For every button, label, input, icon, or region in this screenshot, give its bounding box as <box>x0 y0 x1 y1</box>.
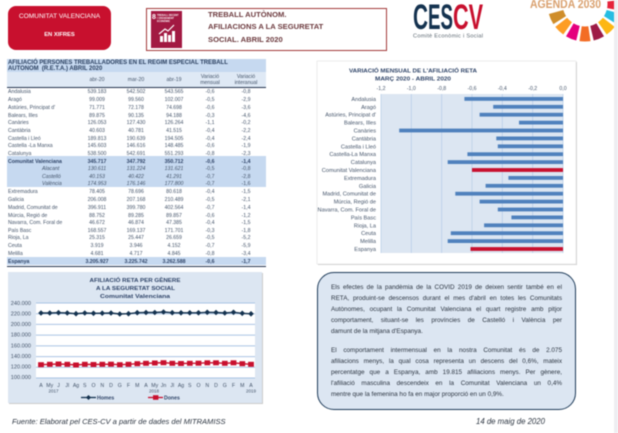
logo: CES-CV: Comitè Econòmic i Social <box>413 34 483 40</box>
series: Dones <box>41 363 251 365</box>
table rows: -1,6 <box>242 181 250 187</box>
y axis labels: 100.000 <box>11 375 31 381</box>
x axis labels <box>377 86 567 92</box>
table rows: 89.857 <box>166 212 182 218</box>
paragraph 1 <box>330 284 562 336</box>
region labels: Canàries <box>354 128 376 134</box>
region labels: Castella i Lleó <box>341 144 376 150</box>
region labels: Comunitat Valenciana <box>322 168 377 174</box>
table rows: 345.717 <box>88 158 106 164</box>
table columns header: interanual <box>235 80 257 86</box>
table rows: Canàries <box>8 120 29 126</box>
table rows: 3.946 <box>130 243 142 249</box>
table rows: -1,2 <box>242 212 250 218</box>
x axis labels: O <box>196 383 201 389</box>
table rows: -0,6 <box>206 259 214 265</box>
table rows: -0,4 <box>206 136 214 142</box>
paragraph 1: Autònomes, ocupant la Comunitat Valenciana el quart registre amb pitjor <box>331 306 562 313</box>
table rows: -2,3 <box>242 151 250 157</box>
table rows: 40.781 <box>128 128 144 134</box>
x axis labels: M <box>135 383 139 389</box>
red badge: Comunitat Valenciana en xifres: COMUNITAT VALENCIANA <box>19 13 100 20</box>
x axis labels: 2018 <box>149 388 160 394</box>
table rows: -0,6 <box>206 143 214 149</box>
table rows: Comunitat Valenciana <box>8 158 62 164</box>
x axis labels: Jl <box>65 383 69 389</box>
table columns header: Variació <box>201 74 219 80</box>
chart title: VARIACIÓ MENSUAL DE L'AFILIACIÓ RETA <box>349 66 477 74</box>
chart title: MARÇ 2020 - ABRIL 2020 <box>375 76 451 82</box>
table rows: 542.691 <box>127 151 145 157</box>
table rows: 174.953 <box>88 181 106 187</box>
table columns header <box>89 74 258 86</box>
table rows: 207.168 <box>127 197 145 203</box>
table rows: Aragó <box>8 97 22 103</box>
table rows: 4.845 <box>168 251 180 257</box>
region labels: Madrid, Comunitat de <box>323 192 376 198</box>
table rows: 176.146 <box>127 181 145 187</box>
table title <box>7 59 266 72</box>
table rows: 74.698 <box>166 105 182 111</box>
x axis labels: S <box>83 383 87 389</box>
table rows: 26.659 <box>166 235 182 241</box>
table rows: -3,6 <box>242 105 250 111</box>
table rows: Astúries, Principat d' <box>8 105 55 111</box>
x axis labels: G <box>118 383 122 389</box>
table columns header: mar-20 <box>128 77 144 83</box>
legend: Dones <box>164 395 180 401</box>
table rows: -2,4 <box>242 136 250 142</box>
table rows: 90.135 <box>128 112 144 118</box>
logo: Agenda 2030 wheel <box>530 0 615 42</box>
table rows: -0,7 <box>206 174 214 180</box>
table rows: -0,6 <box>206 212 214 218</box>
title box <box>146 8 387 51</box>
x axis labels: -0,6 <box>468 86 477 92</box>
chart title: AFILIACIÓ RETA PER GÈNERE <box>90 276 181 284</box>
region labels: Múrcia, Regió de <box>334 200 376 206</box>
y axis labels <box>11 301 31 381</box>
table rows: 148.485 <box>165 143 183 149</box>
x axis labels: N <box>205 383 209 389</box>
region labels: Galicia <box>359 184 377 190</box>
table rows: 102.007 <box>165 97 183 103</box>
y axis labels: 120.000 <box>11 364 31 370</box>
table rows: -0,5 <box>206 97 214 103</box>
table rows: Balears, Illes <box>8 112 38 118</box>
table rows: -0,3 <box>206 112 214 118</box>
table rows: 347.792 <box>127 158 145 164</box>
table rows: 99.009 <box>89 97 105 103</box>
table rows: 169.137 <box>127 228 145 234</box>
x axis labels: -1,0 <box>407 86 416 92</box>
icon: SDG 8 decent work: 8 <box>152 14 156 21</box>
region labels: Ceuta <box>361 231 377 237</box>
region labels: Balears, Illes <box>344 121 376 127</box>
table rows: 25.447 <box>128 235 144 241</box>
heading <box>208 10 324 44</box>
table rows: 538.500 <box>88 151 106 157</box>
table rows: Castella i Lleó <box>8 136 41 142</box>
y axis labels: 200.000 <box>11 322 31 328</box>
bars <box>399 97 563 251</box>
table rows: -0,5 <box>206 197 214 203</box>
table rows: 88.752 <box>89 212 105 218</box>
region labels: Aragó <box>361 105 376 111</box>
x axis labels: A <box>144 383 148 389</box>
table rows: Extremadura <box>8 189 38 195</box>
table rows: 89.285 <box>128 212 144 218</box>
x axis labels: A <box>39 383 43 389</box>
table rows: 46.874 <box>128 220 144 226</box>
icon: SDG 8 decent work <box>150 10 183 49</box>
table rows: -1,4 <box>242 205 250 211</box>
paragraph 2: l'afiliació masculina descendeix en la Comunitat Valenciana un 0,4% <box>331 380 562 387</box>
table rows: -0,6 <box>206 89 214 95</box>
panel: affiliates by gender line chart <box>8 272 264 404</box>
paragraph 1: Els efectes de la pandèmia de la COVID 2019 de deixen sentir també en el <box>331 284 562 291</box>
table rows: -1,1 <box>206 120 214 126</box>
table rows: Alacant <box>42 166 59 172</box>
table rows: -1,5 <box>242 189 250 195</box>
table rows: 206.008 <box>88 197 106 203</box>
region labels: Andalusia <box>351 97 377 103</box>
table rows: 3.262.588 <box>162 259 186 265</box>
region labels <box>318 97 377 253</box>
margin strip <box>614 0 618 433</box>
table: RETA affiliates <box>6 58 267 268</box>
table rows: Múrcia, Regió de <box>8 212 47 218</box>
x axis labels: -1,2 <box>377 86 386 92</box>
table columns header: Variació <box>237 74 255 80</box>
table rows: 78.696 <box>128 189 144 195</box>
table rows: 4.717 <box>130 251 142 257</box>
table rows: -0,7 <box>206 243 214 249</box>
table rows: Cantàbria <box>8 128 30 134</box>
table title: AFILIACIÓ PERSONES TREBALLADORES EN EL REGIM ESPECIAL TREBALL <box>8 60 228 66</box>
region labels: Astúries, Principat d' <box>325 113 376 119</box>
x axis labels <box>39 383 257 394</box>
table header <box>7 72 266 88</box>
table rows: 146.616 <box>127 143 145 149</box>
panel: monthly variation bar chart <box>316 60 578 266</box>
x axis labels: Ag <box>178 383 184 389</box>
region labels: Cantàbria <box>352 136 377 142</box>
table rows: 131.224 <box>127 166 145 172</box>
table rows: 350.712 <box>165 158 183 164</box>
plot background and grid <box>381 94 563 253</box>
icon: SDG 8 decent work: I CREIXEMENT <box>157 17 175 20</box>
legend <box>81 395 180 401</box>
paragraph 2: El comportament intermensual en la nostra Comunitat és de 2.075 <box>331 347 562 354</box>
table rows: -0,7 <box>206 181 214 187</box>
table rows: -5,9 <box>242 243 250 249</box>
x axis labels: Jl <box>170 383 174 389</box>
red badge: Comunitat Valenciana en xifres: EN XIFRES <box>44 32 75 38</box>
table rows: 94.188 <box>166 112 182 118</box>
table rows: 126.264 <box>165 120 183 126</box>
x axis labels: 2017 <box>48 388 59 394</box>
table rows: Rioja, La <box>8 235 28 241</box>
paragraph 1: damunt de la mitjana d'Espanya. <box>331 328 423 335</box>
table rows: 542.502 <box>127 89 145 95</box>
table rows: 551.293 <box>165 151 183 157</box>
region labels: Extremadura <box>344 176 377 182</box>
table rows: Catalunya <box>8 151 31 157</box>
paragraph 2: afiliacions menys, la qual cosa representa un descens del 0,6%, mateix <box>331 358 562 365</box>
region labels: Rioja, La <box>354 223 377 229</box>
table rows: -2,9 <box>242 97 250 103</box>
plot area <box>36 303 255 378</box>
x axis labels: Ag <box>73 383 79 389</box>
chart title: A LA SEGURETAT SOCIAL <box>96 286 176 292</box>
bottom rule <box>7 266 266 267</box>
table rows: -5,2 <box>242 235 250 241</box>
highlight band <box>7 156 266 187</box>
table rows: -0,8 <box>242 166 250 172</box>
x axis labels: My <box>151 383 159 389</box>
panel: commentary text <box>317 272 576 410</box>
table rows: 130.611 <box>88 166 106 172</box>
paragraph 2: percentatge que a Espanya, amb 19.815 afiliacions menys. Per gènere, <box>331 369 562 376</box>
x axis labels: J <box>57 383 60 389</box>
table rows: 190.639 <box>127 136 145 142</box>
table rows: 47.385 <box>166 220 182 226</box>
x axis labels: O <box>91 383 96 389</box>
region labels: Espanya <box>354 247 377 253</box>
table rows: -1,4 <box>242 158 250 164</box>
table rows: -3,4 <box>242 251 250 257</box>
table rows: 396.911 <box>88 205 106 211</box>
table rows: 127.430 <box>127 120 145 126</box>
y axis labels: 180.000 <box>11 333 31 339</box>
paragraph 2: mentre que la femenina ho fa en major proporció en un 0,9%. <box>331 391 504 398</box>
table rows: Andalusia <box>8 89 31 95</box>
heading: AFILIACIONS A LA SEGURETAT <box>208 22 323 31</box>
table rows: 89.875 <box>89 112 105 118</box>
table columns header: mensual <box>200 80 220 86</box>
table rows: 402.564 <box>165 205 183 211</box>
table rows: 25.315 <box>89 235 105 241</box>
table rows: 4.681 <box>90 251 103 257</box>
series: Homes <box>41 312 251 314</box>
x axis labels: -0,4 <box>498 86 507 92</box>
table rows: 99.560 <box>128 97 144 103</box>
x axis labels: D <box>109 383 113 389</box>
table rows: 3.225.742 <box>124 259 148 265</box>
x axis labels: Jn <box>161 383 166 389</box>
heading: TREBALL AUTÒNOM. <box>208 10 286 19</box>
table rows: 4.152 <box>168 243 180 249</box>
x axis labels: D <box>214 383 218 389</box>
table rows: -0,5 <box>206 166 214 172</box>
region labels: Catalunya <box>351 160 377 166</box>
table rows: 539.183 <box>88 89 106 95</box>
x axis labels: 2019 <box>246 388 257 394</box>
table rows: -1,5 <box>242 220 250 226</box>
table rows: 145.603 <box>88 143 106 149</box>
table columns header: abr-20 <box>90 77 104 83</box>
table rows: 131.621 <box>165 166 183 172</box>
table rows: 210.489 <box>165 197 183 203</box>
table rows: 41.291 <box>166 174 182 180</box>
table rows: Ceuta <box>8 243 22 249</box>
icon: SDG 8 decent work: TREBALL DECENT <box>157 14 179 17</box>
table rows: -0,8 <box>206 151 214 157</box>
region labels: País Basc <box>351 215 376 221</box>
table rows: 171.701 <box>165 228 183 234</box>
region labels: Navarra, Com. Foral de <box>318 208 376 214</box>
chart title <box>349 66 477 82</box>
table rows: 126.053 <box>88 120 106 126</box>
table rows: 168.557 <box>88 228 106 234</box>
table rows <box>8 88 251 265</box>
table rows: Espanya <box>8 259 29 265</box>
region labels: Melilla <box>360 239 377 245</box>
table rows: 543.565 <box>165 89 183 95</box>
table title: AUTONOM (R.E.T.A.) ABRIL 2020 <box>8 66 102 72</box>
table rows: 3.919 <box>90 243 103 249</box>
table rows: 80.618 <box>166 189 182 195</box>
table rows: 194.505 <box>165 136 183 142</box>
paragraph 2 <box>330 346 562 398</box>
table rows: -4,6 <box>242 112 250 118</box>
x axis labels: -0,2 <box>528 86 537 92</box>
table rows: 177.800 <box>165 181 183 187</box>
x axis labels: F <box>232 383 235 389</box>
y axis labels: 160.000 <box>11 343 31 349</box>
logo: CES-CV <box>412 0 484 40</box>
table rows: -2,8 <box>242 174 250 180</box>
table rows: 41.515 <box>166 128 182 134</box>
table rows: -0,7 <box>206 205 214 211</box>
paragraph 1: comportament, situant-se les províncies de Castelló i València per <box>331 317 562 324</box>
table rows: 46.672 <box>89 220 105 226</box>
source note: Fuente: Elaborat pel CES-CV a partir de dades del MITRAMISS <box>12 417 226 426</box>
x axis labels: -0,8 <box>437 86 446 92</box>
table rows: -0,8 <box>242 89 250 95</box>
x axis labels: F <box>127 383 130 389</box>
icon: SDG 8 decent work: ECONÒMIC <box>157 20 170 23</box>
red badge: Comunitat Valenciana en xifres <box>8 6 111 50</box>
y axis labels: 240.000 <box>11 301 31 307</box>
x axis labels: N <box>100 383 104 389</box>
x axis labels: M <box>240 383 244 389</box>
total band <box>7 257 266 265</box>
x axis labels: 0,0 <box>559 86 567 92</box>
table rows: -1,8 <box>242 228 250 234</box>
x axis labels: G <box>223 383 227 389</box>
table rows: -0,4 <box>206 220 214 226</box>
table rows: 3.205.927 <box>85 259 109 265</box>
table rows: Madrid, Comunitat de <box>8 205 58 211</box>
table rows: 71.771 <box>89 105 105 111</box>
table rows: Castella -La Manxa <box>8 143 53 149</box>
table rows: Galicia <box>8 197 24 203</box>
table rows: -0,5 <box>206 235 214 241</box>
table rows: -0,2 <box>242 120 250 126</box>
table rows: València <box>42 181 62 187</box>
table rows: -0,6 <box>206 105 214 111</box>
region labels: Castella-La Manxa <box>329 152 377 158</box>
chart title <box>90 276 181 300</box>
table rows: -0,8 <box>206 251 214 257</box>
table rows: 189.813 <box>88 136 106 142</box>
table rows: -2,2 <box>242 128 250 134</box>
table rows: -0,4 <box>206 189 214 195</box>
table rows: 40.603 <box>89 128 105 134</box>
table rows: 72.178 <box>128 105 144 111</box>
date: 14 de maig de 2020 <box>476 417 545 426</box>
table rows: -1,9 <box>242 143 250 149</box>
x axis labels: S <box>188 383 192 389</box>
table rows: -0,6 <box>206 158 214 164</box>
y axis labels: 220.000 <box>11 312 31 318</box>
legend: Homes <box>97 395 114 401</box>
table rows: -2,1 <box>242 197 250 203</box>
table rows: Castelló <box>42 174 61 180</box>
table rows: País Basc <box>8 228 31 234</box>
table rows: 78.405 <box>89 189 105 195</box>
table rows: 399.780 <box>127 205 145 211</box>
heading: SOCIAL. ABRIL 2020 <box>208 35 283 44</box>
table rows: Navarra, Com. Foral de <box>8 220 62 226</box>
x axis labels: My <box>46 383 54 389</box>
table rows: 40.422 <box>128 174 144 180</box>
table rows: 40.153 <box>89 174 105 180</box>
table rows: -1,7 <box>242 259 250 265</box>
table columns header: abr-19 <box>166 77 182 83</box>
table rows: -0,4 <box>206 128 214 134</box>
paragraph 1: RETA, produint-se descensos durant el mes d'abril en totes les Comunitats <box>331 295 562 302</box>
chart title: Comunitat Valenciana <box>100 294 171 300</box>
table rows: Melilla <box>8 251 23 257</box>
x axis labels: A <box>249 383 253 389</box>
y axis labels: 140.000 <box>11 354 31 360</box>
table rows: -0,3 <box>206 228 214 234</box>
